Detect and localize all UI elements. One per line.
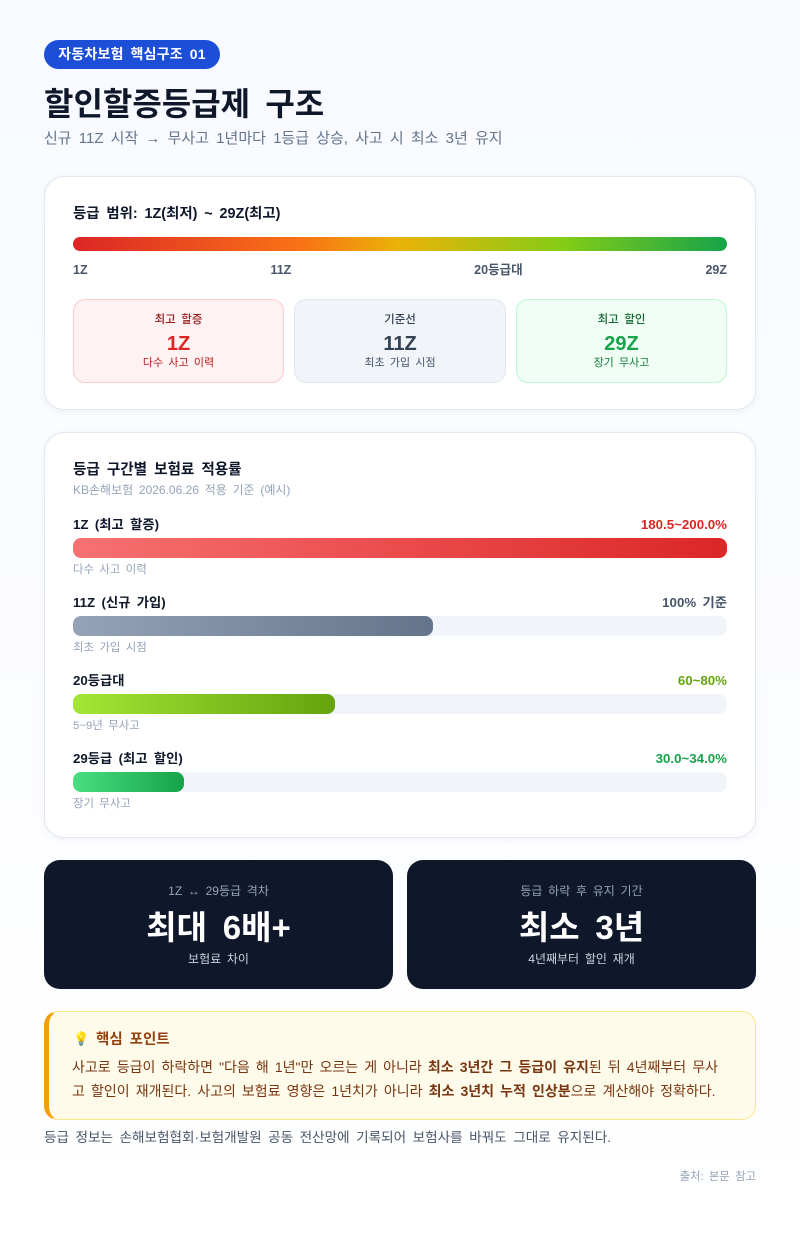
box: highest surcharge: 다수 사고 이력	[143, 357, 214, 369]
rate row: 20 grades: 60~80%	[678, 673, 727, 688]
rate row: 20 grades	[73, 673, 727, 732]
rate row: 29 grade: 29등급 (최고 할인)	[73, 751, 183, 766]
badge: 자동차보험 핵심구조 01	[58, 46, 206, 62]
stat card: premium gap: 1Z ↔ 29등급 격차	[168, 884, 269, 898]
box: highest discount: 최고 할인	[598, 314, 645, 326]
rate row: 20 grades: 5~9년 무사고	[73, 720, 140, 732]
box: highest discount	[516, 299, 727, 383]
rate row: 11Z: 11Z (신규 가입)	[73, 595, 166, 610]
grade range heading: 등급 범위: 1Z(최저) ~ 29Z(최고)	[73, 206, 280, 222]
panel: grade range	[44, 176, 756, 410]
box: baseline: 11Z	[383, 333, 417, 355]
rate row: 29 grade	[73, 751, 727, 810]
stat card: premium gap: 보험료 차이	[188, 952, 249, 966]
box: highest surcharge	[73, 299, 284, 383]
callout: key point	[44, 1011, 756, 1120]
scale labels: 20등급대	[474, 263, 523, 277]
box: highest surcharge: 최고 할증	[155, 314, 202, 326]
stat card: retention period	[407, 860, 756, 989]
box: baseline	[294, 299, 506, 383]
icon: light bulb: 💡	[73, 1032, 89, 1047]
rate row: 11Z: 최초 가입 시점	[73, 642, 147, 654]
rate row: 1Z: 1Z (최고 할증)	[73, 517, 159, 532]
scale labels: 1Z	[73, 263, 88, 277]
footnote: 등급 정보는 손해보험협회·보험개발원 공동 전산망에 기록되어 보험사를 바꿔도 그대로 유지된다.	[44, 1130, 611, 1145]
rate row: 1Z: 다수 사고 이력	[73, 564, 147, 576]
rate row: 11Z	[73, 595, 727, 654]
stat card: retention period: 등급 하락 후 유지 기간	[520, 884, 643, 898]
rate row: 29 grade: 30.0~34.0%	[656, 751, 727, 766]
stat card: premium gap: 최대 6배+	[146, 909, 291, 946]
callout text: 사고로 등급이 하락하면 "다음 해 1년"만 오르는 게 아니라 최소 3년간 그 등급이 유지된 뒤 4년째부터 무사고 할인이 재개된다. 사고의 보험료 영향은 1년치가 아니라 최소 3년치 누적 인상분으로 계산해야 정확하다.	[72, 1059, 718, 1099]
rate row: 1Z	[73, 517, 727, 576]
subtitle: 신규 11Z 시작 → 무사고 1년마다 1등급 상승, 사고 시 최소 3년 유지	[44, 130, 503, 147]
scale labels	[73, 263, 727, 277]
box: baseline: 최초 가입 시점	[364, 357, 436, 369]
panel: premium rates	[44, 432, 756, 838]
title: 할인할증등급제 구조	[44, 86, 324, 122]
rate row: 20 grades: 20등급대	[73, 673, 124, 688]
box: highest discount: 29Z	[604, 333, 639, 355]
box: highest surcharge: 1Z	[167, 333, 190, 355]
source: 출처: 본문 참고	[680, 1171, 756, 1183]
rates heading: 등급 구간별 보험료 적용률	[73, 462, 242, 478]
scale labels: 11Z	[270, 263, 291, 277]
box: baseline: 기준선	[384, 314, 416, 326]
box: highest discount: 장기 무사고	[594, 357, 649, 369]
stat card: premium gap	[44, 860, 393, 989]
rates subheading: KB손해보험 2026.06.26 적용 기준 (예시)	[73, 483, 290, 497]
stat card: retention period: 최소 3년	[519, 909, 644, 946]
rate row: 29 grade: 장기 무사고	[73, 798, 131, 810]
badge	[44, 40, 220, 69]
stat card: retention period: 4년째부터 할인 재개	[528, 952, 635, 966]
grade gradient bar	[73, 237, 727, 251]
rate row: 11Z: 100% 기준	[662, 595, 727, 610]
rate row: 1Z: 180.5~200.0%	[641, 517, 727, 532]
scale labels: 29Z	[705, 263, 727, 277]
callout heading: 핵심 포인트	[96, 1032, 170, 1048]
